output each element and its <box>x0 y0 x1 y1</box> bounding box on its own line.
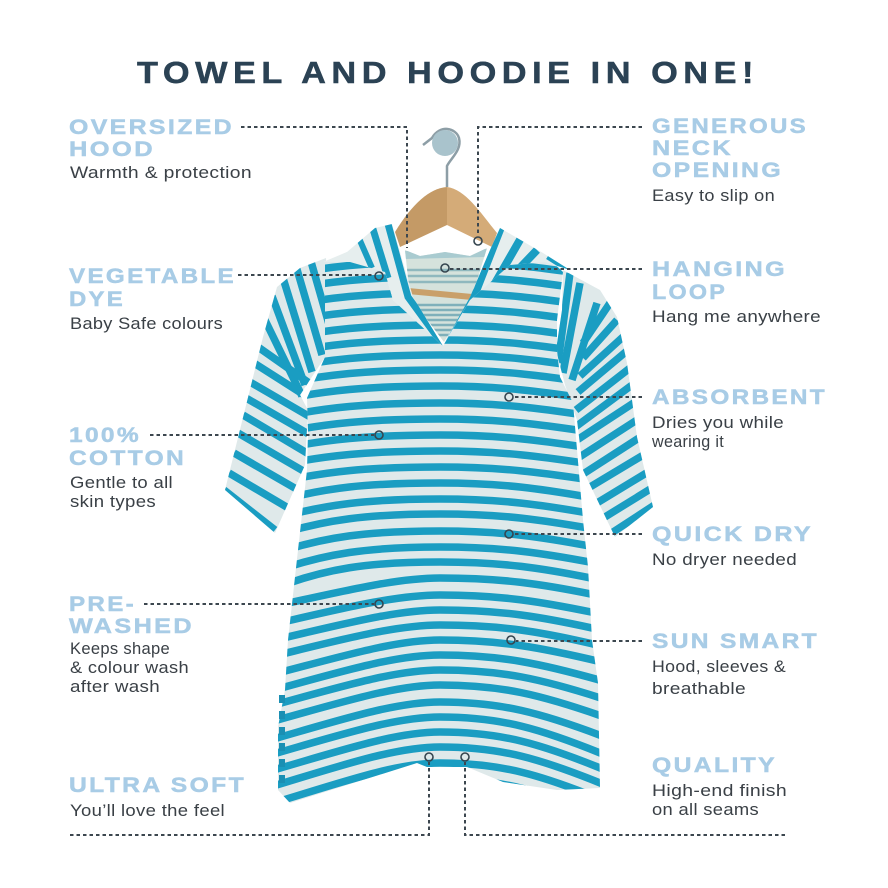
callout: quick dry: QUICK DRY <box>652 523 813 546</box>
callout: vegetable dye: Baby Safe colours <box>70 315 223 333</box>
callout: hanging loop: LOOP <box>652 281 727 304</box>
hood interior <box>405 248 487 342</box>
callout: 100% cotton: skin types <box>70 493 156 511</box>
left hood panel <box>326 224 443 346</box>
garment: hooded towel top <box>220 220 660 823</box>
title: TOWEL AND HOODIE IN ONE! <box>137 55 759 90</box>
callout: quality: on all seams <box>652 801 759 819</box>
callout: pre-washed: & colour wash <box>70 659 189 677</box>
callout: vegetable dye: DYE <box>69 288 125 311</box>
callout: quality: QUALITY <box>652 754 777 777</box>
callout: generous neck opening <box>474 115 808 245</box>
callout: pre-washed <box>69 593 383 696</box>
body stripes <box>278 262 600 803</box>
callout: absorbent: Dries you while <box>652 414 784 432</box>
callout: oversized hood: HOOD <box>69 138 155 161</box>
callout: ultra soft <box>69 753 433 835</box>
callout: generous neck opening: NECK <box>652 137 733 160</box>
callout: quick dry: No dryer needed <box>652 551 797 569</box>
callout: ultra soft: You’ll love the feel <box>70 802 225 820</box>
callout: 100% cotton: 100% <box>69 424 141 447</box>
callout: generous neck opening: OPENING <box>652 159 783 182</box>
callout: pre-washed: WASHED <box>69 615 194 638</box>
icon: hanger <box>395 129 497 247</box>
callout: oversized hood: Warmth & protection <box>70 164 252 182</box>
callout: absorbent: ABSORBENT <box>652 386 827 409</box>
callout: pre-washed: after wash <box>70 678 160 696</box>
callout: pre-washed: Keeps shape <box>70 640 170 658</box>
callout: hanging loop: Hang me anywhere <box>652 308 821 326</box>
callout: absorbent: wearing it <box>651 433 724 451</box>
callout: quality <box>461 753 787 835</box>
callout: 100% cotton: Gentle to all <box>70 474 173 492</box>
callout: oversized hood <box>69 116 407 248</box>
callout: generous neck opening: GENEROUS <box>652 115 808 138</box>
callout: quality: High-end finish <box>652 782 787 800</box>
left sleeve <box>225 258 326 533</box>
callout: 100% cotton <box>69 424 383 511</box>
callout: sun smart: breathable <box>652 680 746 698</box>
callout: pre-washed: PRE- <box>69 593 136 616</box>
callout: absorbent <box>505 386 827 451</box>
callout: oversized hood: OVERSIZED <box>69 116 234 139</box>
callout: hanging loop <box>441 258 821 326</box>
callout: vegetable dye: VEGETABLE <box>69 265 236 288</box>
side vent <box>279 695 285 790</box>
callout: sun smart: Hood, sleeves & <box>652 658 786 676</box>
callout: hanging loop: HANGING <box>652 258 787 281</box>
callout: ultra soft: ULTRA SOFT <box>69 774 246 797</box>
callout: sun smart: SUN SMART <box>652 630 819 653</box>
callout: quick dry <box>505 523 813 569</box>
callout: generous neck opening: Easy to slip on <box>652 187 775 205</box>
right hood panel <box>445 228 567 342</box>
right sleeve <box>557 270 653 537</box>
callout: sun smart <box>507 630 819 698</box>
callout: 100% cotton: COTTON <box>69 447 186 470</box>
callout: vegetable dye <box>69 265 383 333</box>
